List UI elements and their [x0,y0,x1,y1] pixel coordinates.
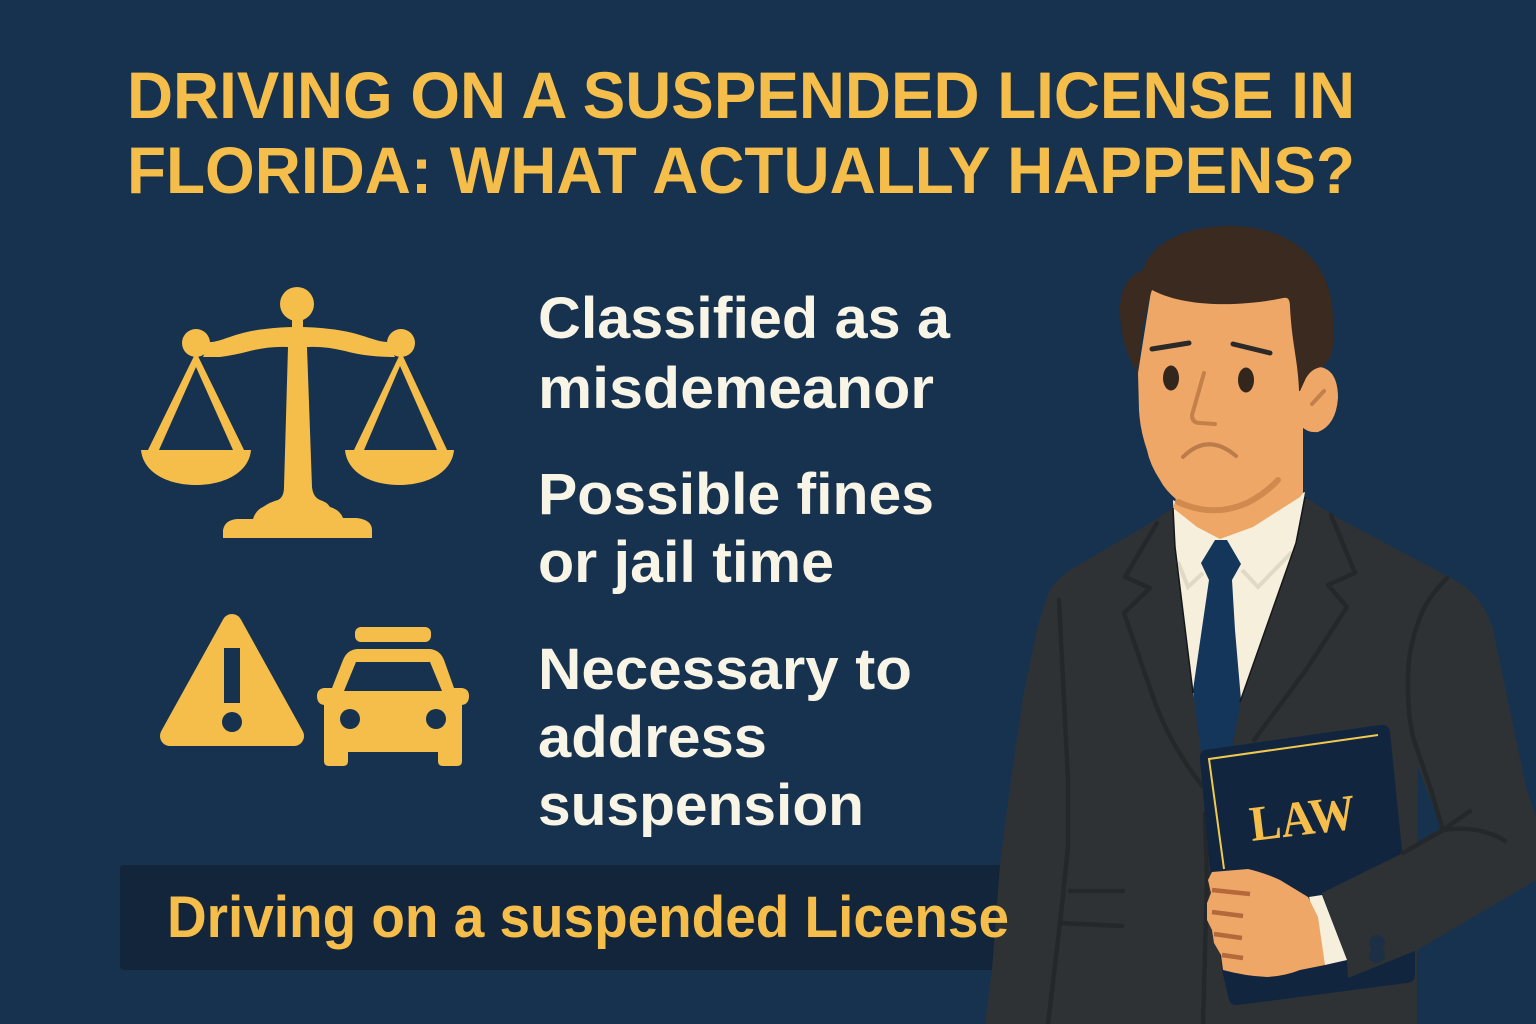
forearm sleeve [1322,811,1536,978]
book: LAW [1247,783,1359,852]
title: FLORIDA: WHAT ACTUALLY HAPPENS? [127,133,1355,207]
footer banner [120,865,1020,970]
gap between body and arm [1417,767,1443,844]
shirt edge lines [1173,497,1305,702]
bullet text: misdemeanor: Classified as a [538,286,951,351]
footer text: Driving on a suspended License [167,885,1009,950]
icon: car [317,627,469,766]
bullet text: fines: or jail time [538,530,834,595]
icon: scales of justice [141,287,454,538]
bullet text: address suspension: suspension [538,773,864,838]
mouth [1183,444,1236,457]
shirt [1173,492,1305,745]
jacket seams [1048,515,1447,1024]
bullet text: fines [538,462,934,595]
jacket [985,498,1536,1024]
bullet text: address suspension: address [538,705,767,770]
title [127,58,1355,207]
icon: warning triangle [170,624,294,736]
eyebrows [1152,343,1270,353]
bullet text: address suspension [538,637,912,838]
head [1138,285,1303,515]
ear [1302,367,1338,432]
tie [1193,540,1241,760]
collar shadow [1178,552,1292,587]
title: DRIVING ON A SUSPENDED LICENSE IN [127,58,1355,132]
hair [1120,226,1334,391]
bullet text: address suspension: Necessary to [538,637,912,702]
shirt cuff [1309,895,1347,965]
bullet text: fines: Possible fines [538,462,934,527]
chin line [1178,480,1278,510]
hand [1207,869,1325,977]
nose [1192,373,1215,424]
eyes [1163,366,1254,392]
book [1200,725,1415,1005]
bullet text: misdemeanor [538,286,951,421]
bullet text: misdemeanor: misdemeanor [538,356,934,421]
neck [1173,480,1303,539]
illustration: lawyer holding law book [985,226,1536,1024]
